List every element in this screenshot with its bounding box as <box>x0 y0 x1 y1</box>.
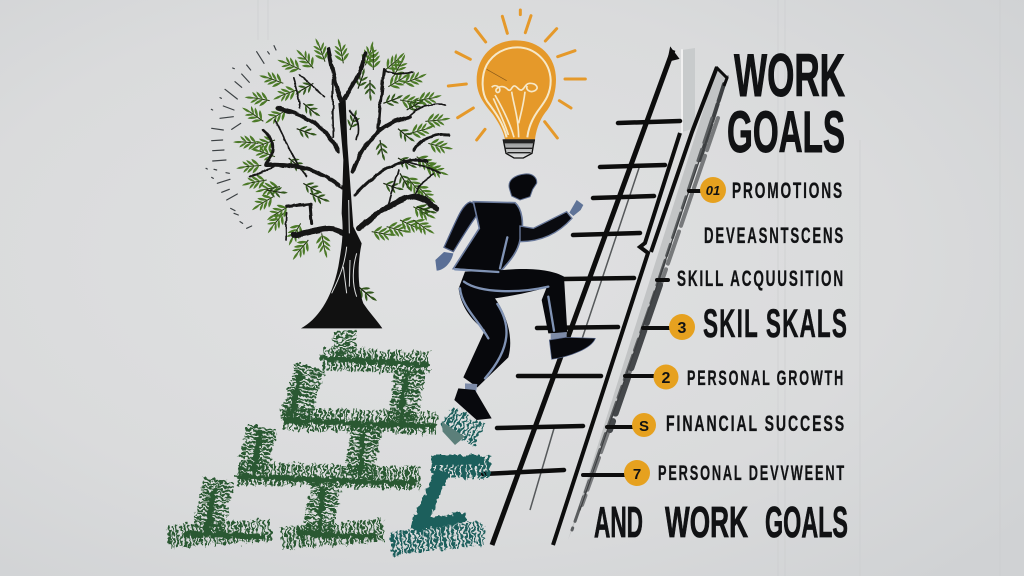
bulb glass <box>477 40 556 139</box>
connector lines <box>583 191 703 475</box>
badge 1 <box>700 177 726 203</box>
badge 7 <box>624 460 650 486</box>
ladder rails <box>492 50 727 545</box>
teal patch <box>442 422 465 445</box>
badge 3: 3 <box>678 320 687 337</box>
label: skill acquusition: SKILL ACQUUSITION <box>677 266 845 291</box>
leaf pyramid <box>168 332 490 543</box>
front hand <box>569 200 583 216</box>
ladder <box>483 48 728 545</box>
trunk hatching <box>332 147 357 297</box>
footer heading: and work goals: GOALS <box>765 498 848 547</box>
badge 1: 01 <box>706 183 720 198</box>
footer heading: and work goals <box>594 498 848 547</box>
badge S: S <box>639 418 649 435</box>
badge S <box>632 413 656 437</box>
badge 7: 7 <box>633 466 641 483</box>
leaves: inner ring <box>266 67 439 307</box>
lightbulb icon <box>448 10 585 158</box>
tree illustration <box>206 35 455 328</box>
gray sketched rail <box>568 70 728 540</box>
torso <box>453 202 522 273</box>
bulb base <box>503 139 534 158</box>
trousers <box>459 269 567 387</box>
label: personal growth: PERSONAL GROWTH <box>687 367 845 390</box>
back arm <box>444 202 483 252</box>
trouser highlights <box>455 237 554 378</box>
climbing man <box>435 174 595 420</box>
label: skil skals: SKIL SKALS <box>703 302 848 346</box>
branches <box>250 48 448 240</box>
back sock <box>465 383 477 393</box>
label: personal devvweent: PERSONAL DEVVWEENT <box>658 462 846 485</box>
filament <box>492 83 537 137</box>
bulb inner outline <box>483 47 551 137</box>
back shoe <box>454 388 492 420</box>
label: financial success: FINANCIAL SUCCESS <box>666 411 846 436</box>
GOALS: GOALS <box>727 100 845 165</box>
head <box>509 174 537 200</box>
trunk <box>301 100 382 328</box>
footer heading: and work goals: AND <box>594 498 643 547</box>
front arm <box>520 212 572 242</box>
badge 3 <box>669 314 695 340</box>
WORK: WORK <box>734 42 845 109</box>
back hand <box>435 252 453 271</box>
teal figure <box>392 417 490 543</box>
radiating dashes around tree <box>206 46 276 228</box>
green lattice <box>168 332 437 538</box>
front sock <box>551 332 567 343</box>
label: deveasntscens: DEVEASNTSCENS <box>704 223 845 248</box>
rungs <box>483 121 680 474</box>
front shoe <box>549 337 595 359</box>
bulb rays <box>448 10 585 140</box>
additional leaf sprigs <box>270 83 299 106</box>
top post <box>682 48 695 132</box>
heading: work goals <box>727 42 845 165</box>
badge 2: 2 <box>662 370 671 387</box>
footer heading: and work goals: WORK <box>665 498 748 547</box>
leaves: outer ring <box>232 35 455 264</box>
badge 2 <box>654 364 678 390</box>
label: promotions: PROMOTIONS <box>732 178 844 203</box>
